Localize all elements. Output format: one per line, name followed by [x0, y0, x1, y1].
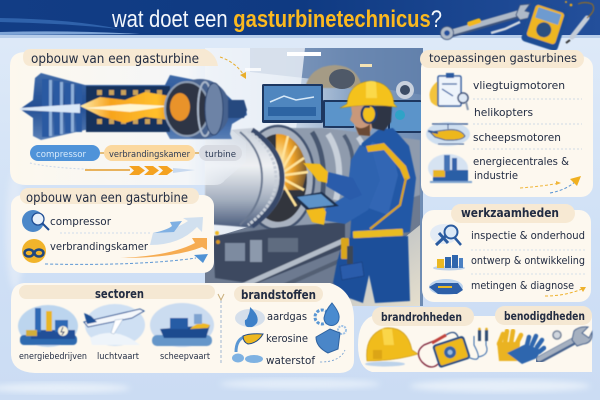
icon: multimeter	[520, 0, 570, 52]
heading: brandstoffen: brandstoffen	[241, 288, 316, 302]
arrow: dashed to scene	[220, 57, 246, 79]
arrows: flow sweep	[45, 217, 208, 264]
label: luchtvaart: luchtvaart	[97, 352, 140, 362]
label: compressor: compressor	[50, 215, 111, 228]
label: ontwerp & ontwikkeling: ontwerp & ontwikkeling	[471, 255, 585, 267]
heading: sectoren: sectoren	[95, 286, 144, 301]
heading: brandrohheden	[372, 307, 474, 326]
icon: shield	[316, 329, 340, 353]
icon: kerosine	[236, 334, 263, 352]
harness	[366, 143, 410, 181]
icon: probe and wire	[565, 1, 594, 43]
icon: wrench and nut	[539, 327, 592, 360]
label: metingen & diagnose: metingen & diagnose	[471, 280, 574, 292]
flow pills	[30, 145, 242, 161]
gas turbine cutaway	[20, 73, 247, 140]
icon: multimeter with probes	[418, 328, 488, 368]
pill: turbine: turbine	[205, 149, 236, 160]
icon: waterstof	[232, 354, 263, 363]
title: wat doet een gasturbinetechnicus?	[111, 6, 442, 33]
arm to turbine	[326, 172, 362, 200]
icon: header tools	[440, 0, 594, 52]
label: helikopters: helikopters	[474, 107, 533, 119]
label: scheepvaart: scheepvaart	[160, 352, 211, 362]
legs	[333, 236, 410, 303]
panel: sectoren en brandstoffen	[11, 283, 354, 373]
monitors	[262, 84, 421, 133]
heading pill: werkzaamheden	[461, 206, 559, 220]
heading pill: opbouw van een gasturbine	[26, 191, 188, 206]
label: waterstof: waterstof	[266, 354, 316, 367]
heading pill: opbouw van een gasturbine	[31, 51, 199, 67]
worker	[293, 81, 416, 303]
icon: scheepvaart	[150, 303, 214, 347]
icon: screwdriver	[491, 22, 520, 33]
glove: yellow	[497, 331, 521, 361]
label: scheepsmotoren: scheepsmotoren	[473, 132, 561, 144]
torso	[350, 128, 416, 238]
label: energiebedrijven: energiebedrijven	[19, 352, 87, 362]
arrow: dashed curve	[320, 350, 345, 362]
label: inspectie & onderhoud: inspectie & onderhoud	[471, 230, 585, 242]
gloves	[303, 163, 328, 183]
icon: yellow safety helmet	[365, 328, 418, 366]
icon: droplet and gear	[315, 303, 346, 334]
machinery base	[213, 222, 355, 294]
pill: verbrandingskamer: verbrandingskamer	[109, 149, 190, 160]
icon: helikopter	[426, 122, 470, 146]
label: energiecentrales & industrie: energiecentrales &	[473, 156, 569, 168]
icon: aardgas flame	[235, 307, 265, 327]
arrow: dashed	[545, 287, 586, 296]
icon: energiecentrale	[428, 154, 472, 183]
panel: werkzaamheden	[422, 204, 591, 302]
factory backdrop	[205, 48, 423, 306]
heading pill	[451, 204, 575, 223]
icon: vliegtuigmotoren clipboard	[430, 73, 468, 110]
pill: compressor: compressor	[36, 149, 86, 160]
hard hat	[340, 81, 397, 108]
icon: wrench	[440, 4, 533, 40]
label: energiecentrales & industrie: industrie	[474, 170, 518, 182]
tablet	[293, 192, 339, 210]
panel: toepassingen gasturbines	[420, 50, 593, 197]
pill: turbine	[199, 145, 242, 161]
icon: energiebedrijven	[18, 305, 78, 347]
icon: metingen	[429, 279, 463, 295]
hair and neck	[366, 106, 392, 131]
arrow: flow chevrons	[30, 163, 195, 175]
earmuff	[360, 104, 378, 124]
arm to tablet	[322, 145, 380, 224]
heading pill: toepassingen gasturbines	[429, 51, 577, 65]
header band	[0, 0, 600, 38]
icon: work gloves	[497, 331, 544, 364]
label: verbrandingskamer: verbrandingskamer	[50, 240, 148, 253]
icon: inspectie	[430, 224, 461, 245]
icon: ontwerp	[433, 255, 465, 270]
glove: blue	[507, 336, 544, 364]
heading: benodigdheden	[495, 306, 592, 325]
icon: compressor magnifier	[22, 210, 49, 232]
central illustration: technician at turbine	[205, 48, 423, 306]
pill: verbrandingskamer	[104, 145, 195, 161]
pill: compressor	[30, 145, 100, 161]
icon: combustion chamber	[22, 239, 46, 263]
heading: sectoren	[19, 285, 215, 301]
face	[350, 106, 372, 136]
heading: brandrohheden: brandrohheden	[381, 310, 462, 324]
label: vliegtuigmotoren: vliegtuigmotoren	[473, 80, 565, 92]
large turbine cylinder and glowing blades	[205, 126, 314, 230]
label: kerosine: kerosine	[266, 332, 308, 345]
label: energiecentrales & industrie	[473, 156, 569, 182]
label: aardgas: aardgas	[267, 310, 307, 323]
belt	[353, 229, 403, 238]
rear turbine sections	[285, 128, 420, 230]
panel: opbouw van een gasturbine (list)	[11, 188, 214, 273]
panel: brandrohheden en benodigdheden	[358, 306, 592, 372]
icon: luchtvaart	[84, 304, 145, 346]
arrows: decorative flow	[520, 176, 581, 193]
panel: opbouw van een gasturbine (diagram)	[10, 49, 247, 185]
